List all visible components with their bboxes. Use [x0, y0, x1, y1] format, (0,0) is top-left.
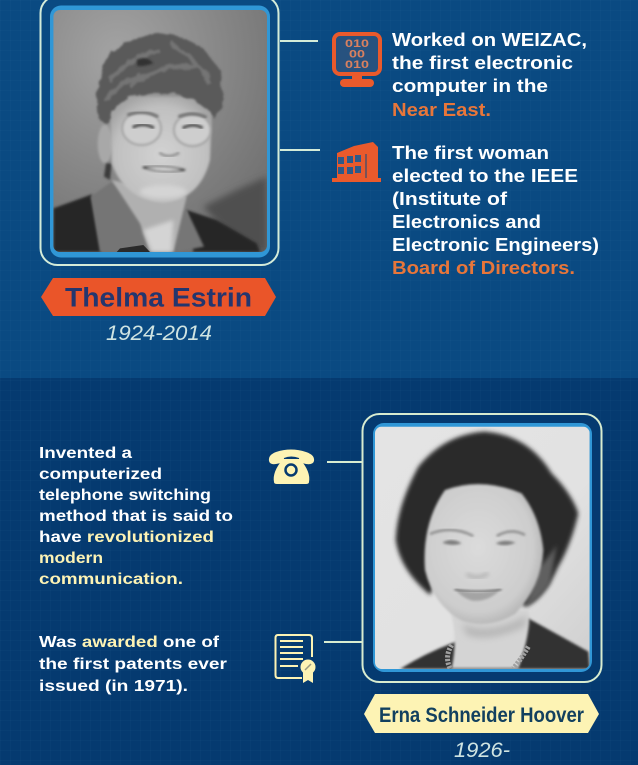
name banner: Erna Schneider Hoover: Erna Schneider Hoover — [379, 703, 585, 727]
portrait frame: Thelma Estrin — [40, 0, 278, 265]
icon: computer with binary: 00 — [349, 48, 365, 60]
panel: Thelma Estrin — [40, 0, 278, 345]
text block: IEEE: elected to the IEEE — [392, 166, 578, 186]
text block: IEEE: (Institute of — [392, 189, 508, 209]
text block: IEEE: The first woman — [392, 143, 549, 163]
text block: WEIZAC: the first electronic — [392, 53, 573, 73]
text block: telephone switching: telephone switching — [39, 487, 211, 504]
name banner: Thelma Estrin: Thelma Estrin — [65, 282, 252, 312]
text block: telephone switching — [39, 445, 233, 588]
face — [425, 484, 543, 624]
text block: telephone switching: communication. — [39, 571, 183, 588]
text block: telephone switching: computerized — [39, 466, 162, 483]
icon: office building — [332, 142, 381, 182]
background: top section — [0, 0, 638, 378]
text block: IEEE: Electronic Engineers) — [392, 235, 599, 255]
text block: patent: issued (in 1971). — [39, 678, 188, 695]
hair — [396, 432, 578, 607]
connector lines: Thelma Estrin — [280, 41, 320, 150]
text block: IEEE: Board of Directors. — [392, 258, 575, 278]
text block: patent: the first patents ever — [39, 656, 227, 673]
text block: WEIZAC: Worked on WEIZAC, — [392, 30, 587, 50]
text block: telephone switching: modern — [39, 550, 103, 567]
years: Thelma Estrin: 1924-2014 — [106, 322, 212, 345]
dress — [400, 618, 590, 669]
icon: telephone — [269, 450, 314, 484]
name banner: Erna Schneider Hoover — [364, 694, 599, 733]
text block: WEIZAC: Near East. — [392, 100, 491, 120]
text block: WEIZAC: computer in the — [392, 76, 548, 96]
icon: computer with binary — [334, 34, 380, 87]
panel: Erna Schneider Hoover — [362, 414, 602, 762]
hair — [97, 34, 223, 124]
text block: WEIZAC — [392, 30, 587, 120]
photo: Thelma Estrin — [53, 10, 267, 252]
necklace — [448, 645, 528, 668]
text block: telephone switching: Invented a — [39, 445, 132, 462]
text block: telephone switching: method that is said to — [39, 508, 233, 525]
years: Erna Schneider Hoover: 1926- — [454, 739, 510, 762]
icon: computer with binary: 010 — [345, 59, 369, 71]
text block: patent: Was awarded one of — [39, 634, 220, 651]
icon: computer with binary: 010 — [345, 38, 369, 50]
portrait frame: Erna Schneider Hoover — [362, 414, 602, 682]
text block: patent — [39, 634, 227, 695]
neck — [450, 610, 529, 668]
icon: patent certificate — [276, 635, 316, 683]
photo: Erna Schneider Hoover — [375, 427, 590, 669]
glasses — [122, 112, 211, 146]
connector lines: Erna Schneider Hoover — [324, 462, 362, 642]
name banner: Thelma Estrin — [41, 278, 276, 316]
background: bottom section — [0, 378, 638, 765]
text block: IEEE — [392, 143, 599, 278]
text block: telephone switching: have revolutionized — [39, 529, 214, 546]
text block: IEEE: Electronics and — [392, 212, 541, 232]
